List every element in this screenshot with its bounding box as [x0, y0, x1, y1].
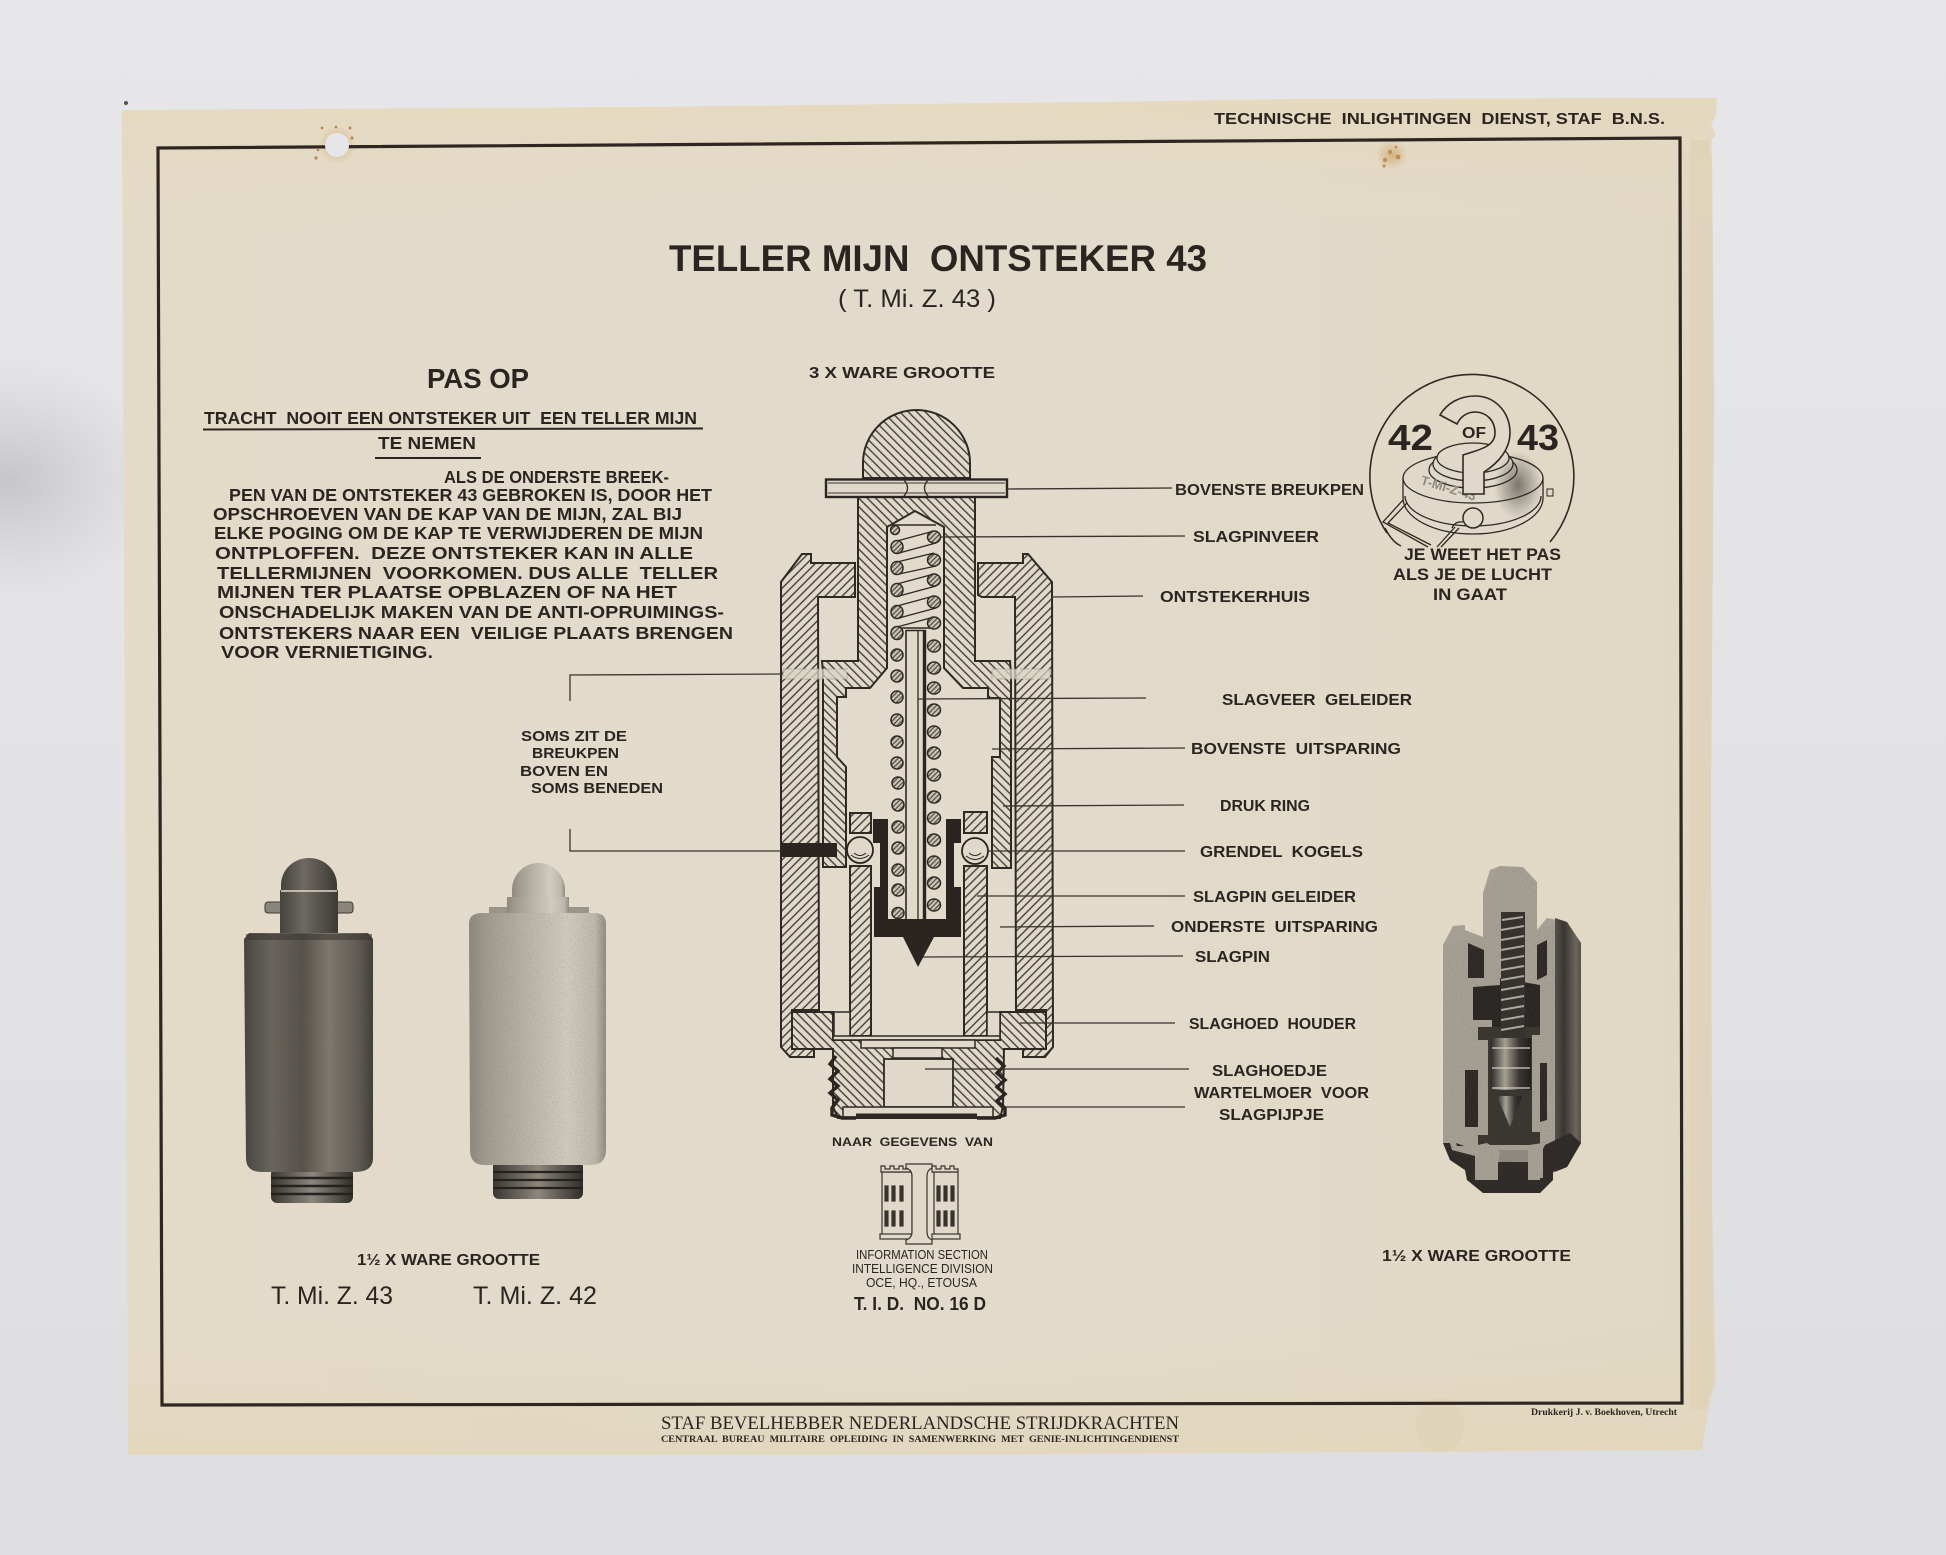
punched hole — [325, 133, 349, 157]
part labels: BOVENSTE BREUKPEN — [1175, 482, 1364, 499]
footer imprint: Drukkerij J. v. Boekhoven, Utrecht — [1531, 1407, 1677, 1417]
note: shear pin position: BREUKPEN — [532, 745, 619, 762]
part labels: DRUK RING — [1220, 798, 1310, 815]
warning text block: ALS DE ONDERSTE BREEK- — [444, 467, 669, 487]
warning text block: OPSCHROEVEN VAN DE KAP VAN DE MIJN, ZAL BIJ — [213, 504, 682, 524]
title: ( T. Mi. Z. 43 ) — [838, 285, 996, 313]
labels under photos — [271, 1252, 597, 1310]
warning text block: ELKE POGING OM DE KAP TE VERWIJDEREN DE MIJN — [214, 523, 703, 543]
labels under photos: T. Mi. Z. 43 — [271, 1282, 393, 1310]
issuing office — [852, 1247, 993, 1314]
warning text block: VOOR VERNIETIGING. — [221, 642, 433, 662]
inset: 42 or 43 mine: OF — [1462, 425, 1486, 442]
icon: engineer castle logo — [880, 1164, 960, 1244]
black lower shear pin — [781, 843, 837, 857]
part labels: ONDERSTE UITSPARING — [1171, 919, 1378, 936]
note: shear pin position: SOMS BENEDEN — [531, 780, 663, 797]
part labels: SLAGPINVEER — [1193, 529, 1319, 546]
caption: IN GAAT — [1433, 586, 1507, 604]
handle — [1383, 500, 1459, 547]
caption: JE WEET HET PAS — [1404, 546, 1561, 564]
issuing office: T. I. D. NO. 16 D — [854, 1294, 986, 1314]
header credit: TECHNISCHE INLIGHTINGEN DIENST, STAF B.N.S. — [1214, 111, 1665, 128]
spring links — [892, 525, 936, 628]
thread — [830, 1056, 1005, 1118]
part labels: SLAGVEER GELEIDER — [1222, 692, 1412, 709]
question mark — [1440, 396, 1510, 494]
footer imprint — [661, 1407, 1677, 1444]
firing body and sleeve — [822, 497, 1011, 868]
part labels: SLAGPIN GELEIDER — [1193, 889, 1356, 906]
note: shear pin position: SOMS ZIT DE — [521, 728, 627, 745]
warning heading: TRACHT NOOIT EEN ONTSTEKER UIT EEN TELLER MIJN — [204, 408, 697, 428]
part labels: SLAGPIJPJE — [1219, 1107, 1324, 1124]
footer imprint: STAF BEVELHEBBER NEDERLANDSCHE STRIJDKRACHTEN — [661, 1413, 1179, 1434]
footer imprint: CENTRAAL BUREAU MILITAIRE OPLEIDING IN SAMENWERKING MET GENIE-INLICHTINGENDIENST — [661, 1434, 1179, 1444]
part labels: SLAGPIN — [1195, 949, 1270, 966]
labels under photos: T. Mi. Z. 42 — [473, 1282, 597, 1310]
warning text block: ONSCHADELIJK MAKEN VAN DE ANTI-OPRUIMINGS- — [219, 602, 724, 622]
part labels: SLAGHOED HOUDER — [1189, 1016, 1356, 1033]
scale label: cutaway: 1½ X WARE GROOTTE — [1382, 1248, 1571, 1265]
part labels: BOVENSTE UITSPARING — [1191, 741, 1401, 758]
warning heading — [203, 363, 703, 458]
note: shear pin position — [520, 728, 663, 797]
screw plug — [792, 1012, 1046, 1118]
warning text block: TELLERMIJNEN VOORKOMEN. DUS ALLE TELLER — [217, 563, 718, 583]
warning text block: MIJNEN TER PLAATSE OPBLAZEN OF NA HET — [217, 582, 677, 602]
upper shear pin — [826, 480, 1007, 497]
inset: 42 or 43 mine: 42 — [1388, 417, 1433, 458]
inset: 42 or 43 mine: T-Mi-Z-43 — [1419, 473, 1478, 504]
lower shear zone — [783, 669, 1050, 679]
inset: 42 or 43 mine — [1370, 374, 1574, 604]
warning heading: TE NEMEN — [378, 433, 476, 453]
part labels: SLAGHOEDJE — [1212, 1063, 1327, 1080]
outer casing, right — [978, 554, 1053, 1057]
source credit: NAAR GEGEVENS VAN — [832, 1137, 993, 1149]
warning text block: ONTPLOFFEN. DEZE ONTSTEKER KAN IN ALLE — [215, 543, 693, 563]
warning text block: PEN VAN DE ONTSTEKER 43 GEBROKEN IS, DOOR HET — [229, 485, 712, 505]
cross-section diagram — [781, 410, 1053, 1118]
caption — [1393, 546, 1561, 604]
labels under photos: 1½ X WARE GROOTTE — [357, 1252, 540, 1269]
part labels: GRENDEL KOGELS — [1200, 844, 1363, 861]
part labels: ONTSTEKERHUIS — [1160, 589, 1310, 606]
collar pieces — [850, 812, 987, 1036]
frame border — [158, 138, 1682, 1405]
part labels: WARTELMOER VOOR — [1194, 1085, 1369, 1102]
title: TELLER MIJN ONTSTEKER 43 — [669, 238, 1207, 279]
warning text block — [213, 467, 733, 662]
part labels — [1160, 482, 1412, 1124]
locking balls — [847, 837, 988, 864]
outer casing, left — [781, 554, 855, 1057]
issuing office: OCE, HQ., ETOUSA — [866, 1275, 977, 1290]
photo: T.Mi.Z.43 — [244, 858, 373, 1203]
leader lines — [570, 488, 1189, 1107]
circle outline — [1370, 374, 1574, 542]
photo: cutaway — [1443, 866, 1581, 1193]
mine body — [1403, 443, 1543, 534]
issuing office: INTELLIGENCE DIVISION — [852, 1261, 993, 1276]
title — [669, 238, 1207, 313]
caption: ALS JE DE LUCHT — [1393, 566, 1552, 584]
warning text block: ONTSTEKERS NAAR EEN VEILIGE PLAATS BRENGEN — [219, 623, 733, 643]
inset: 42 or 43 mine: 43 — [1517, 417, 1559, 458]
spring guide rod — [906, 630, 926, 919]
warning heading: PAS OP — [427, 363, 529, 394]
photo: T.Mi.Z.42 — [469, 863, 606, 1199]
spring coils — [890, 526, 940, 918]
issuing office: INFORMATION SECTION — [856, 1247, 988, 1262]
scale label: 3x: 3 X WARE GROOTTE — [809, 365, 995, 382]
firing pin body — [873, 819, 961, 967]
striker dome — [863, 410, 970, 478]
note: shear pin position: BOVEN EN — [520, 763, 608, 780]
paper sheet — [122, 98, 1717, 1455]
